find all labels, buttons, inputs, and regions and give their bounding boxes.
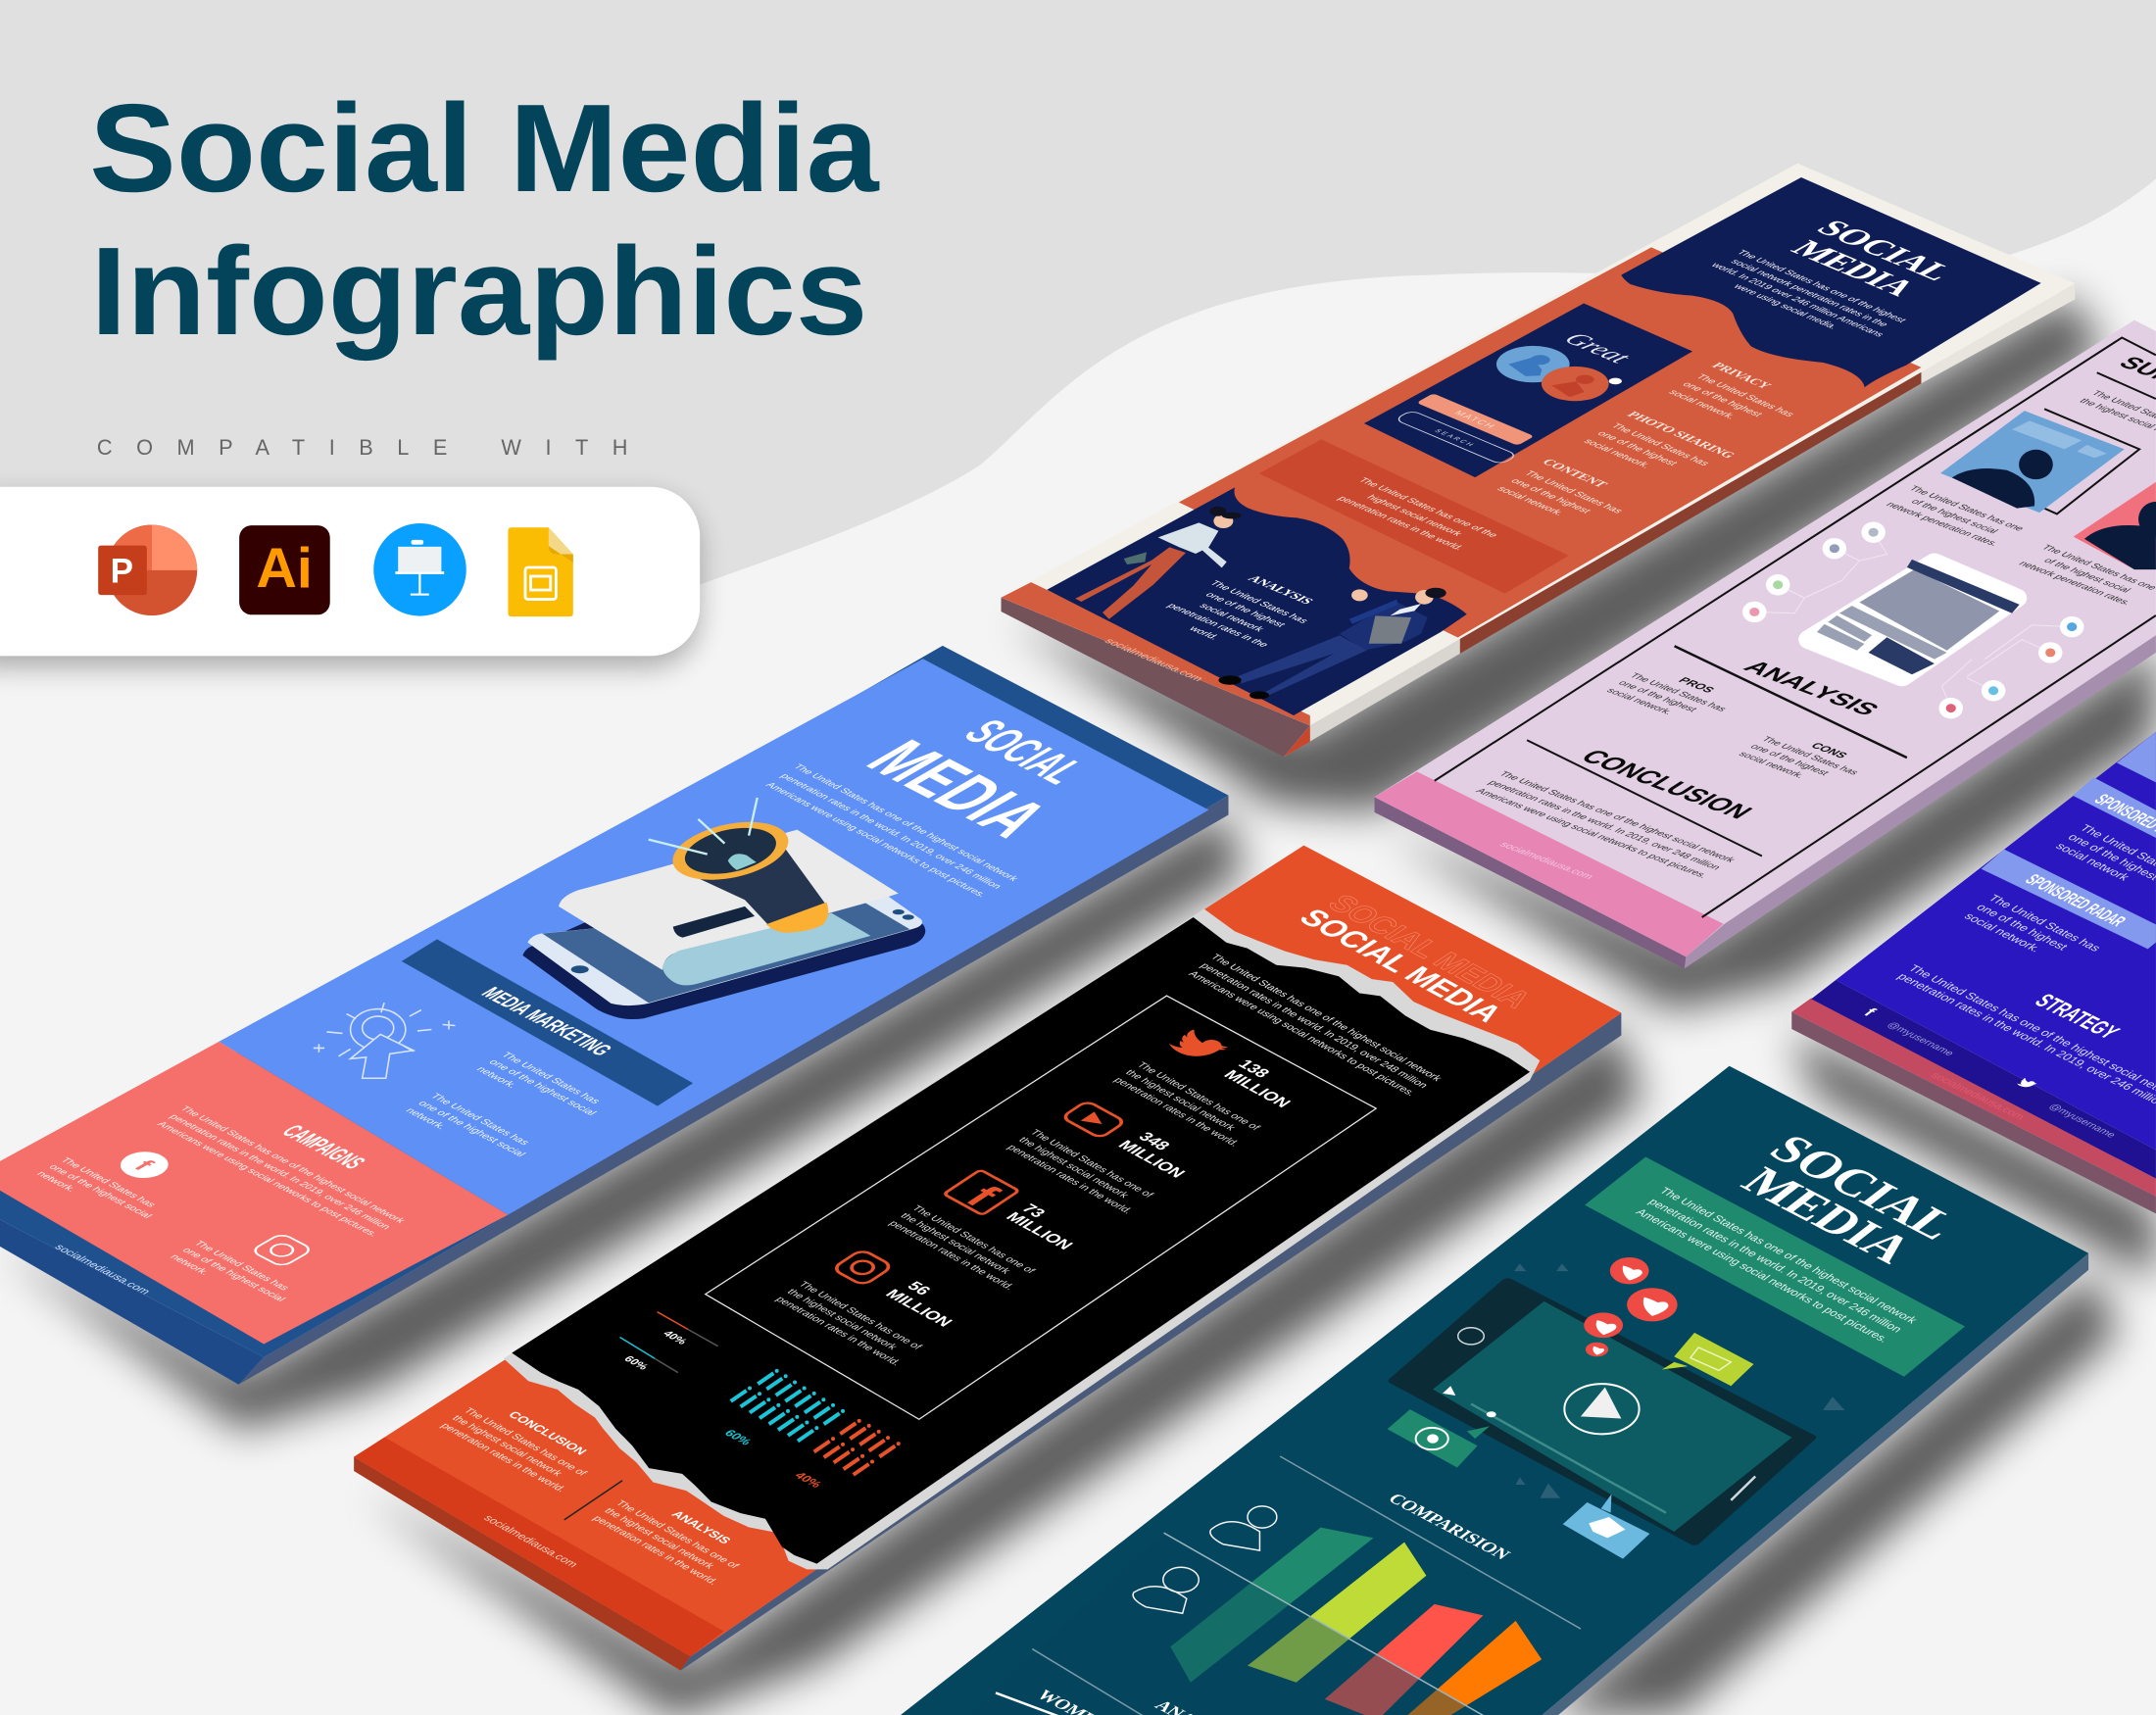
text: pros: The United States has (1627, 672, 1729, 713)
text: instagram paragraph: one of the highest social (179, 1247, 288, 1303)
top navy wave block (1621, 177, 2041, 387)
illustration: tablet with social icons (1527, 521, 2083, 857)
text: callout paragraph: The United States has one of the (1355, 476, 1500, 539)
stat: instagram: MILLION (881, 1287, 956, 1330)
text: intro paragraph: The United States has one of the highest social network (791, 763, 1021, 883)
text: analysis: penetration rates in the world. (590, 1514, 720, 1587)
card slab and colour blocks (1791, 732, 2156, 1213)
icon: facebook: f (956, 1179, 1011, 1213)
chart: percentages and pictogram: 60% (621, 1354, 650, 1372)
title: Social Media (89, 78, 880, 219)
button: match (1416, 393, 1535, 446)
text: photo sharing: one of the highest (1594, 429, 1680, 467)
social handle: facebook (1860, 1005, 1957, 1058)
heading: comparision: COMPARISION (1384, 1491, 1514, 1562)
panel: black and orange infographic card (354, 846, 1621, 1671)
text: analysis: one of the highest (1202, 591, 1288, 629)
footer url: socialmediausa.com (1102, 637, 1205, 683)
text: intro paragraph: world. In 2019 over 246 million Americans (1707, 262, 1886, 338)
text: marketing paragraph two: The United States has (427, 1092, 532, 1147)
text: facebook paragraph: The United States has (58, 1156, 159, 1209)
text: privacy: The United States has (1693, 372, 1797, 418)
button: match: MATCH (1451, 410, 1497, 430)
stat: instagram (773, 1250, 956, 1367)
stat: facebook: MILLION (1002, 1209, 1077, 1252)
panel: red and navy infographic card (1002, 164, 2075, 757)
stat: facebook: the highest social network (898, 1211, 1013, 1276)
social handle: facebook: @myusername (1885, 1020, 1957, 1058)
stat: instagram: penetration rates in the world. (773, 1295, 904, 1367)
heading: social media: MEDIA (1731, 1158, 1926, 1271)
text: analysis: ANALYSIS (668, 1509, 734, 1545)
text: content (1494, 457, 1626, 530)
banner: media marketing: MEDIA MARKETING (475, 984, 617, 1059)
button: search: SEARCH (1433, 428, 1476, 448)
footer url: socialmediausa.com (1928, 1071, 2027, 1122)
text: radar paragraph: one of the highest (1974, 902, 2071, 953)
text: cons: social network. (1736, 751, 1807, 780)
text: callout paragraph: penetration rates in the world. (1335, 495, 1466, 552)
card artwork (0, 646, 1229, 1385)
heading: analysis: ANALYSIS (1738, 658, 1885, 719)
text: marketing paragraph one: The United States has (499, 1051, 603, 1105)
text: content: The United States has (1522, 469, 1626, 514)
text: instagram paragraph: network. (168, 1253, 212, 1277)
card artwork (1375, 320, 2156, 968)
text: conclusion: CONCLUSION (506, 1409, 590, 1457)
stat: facebook: penetration rates in the world. (886, 1219, 1016, 1292)
illustration: bottom navy block with woman and man (1047, 487, 1467, 715)
stat: instagram: The United States has one of (796, 1280, 924, 1351)
text: content: CONTENT (1539, 457, 1611, 489)
icons: people outlines (1133, 1506, 1277, 1613)
text: intro paragraph: were using social media. (1730, 282, 1839, 330)
text: marketing paragraph one: one of the highest social (486, 1058, 599, 1117)
text: cons: The United States has (1759, 736, 1861, 776)
chart: percentages and pictogram: 60% (721, 1428, 755, 1447)
text: analysis: ANALYSIS (1245, 573, 1317, 606)
icon: click cursor (314, 1003, 455, 1078)
panel: lilac infographic card (1375, 320, 2156, 968)
phone illustration: profile circles (1496, 346, 1622, 401)
frame around statistics (706, 996, 1376, 1419)
text: content: social network. (1494, 485, 1567, 517)
icon: PowerPoint: P (111, 553, 133, 591)
text: image caption one: of the highest social (1908, 498, 2000, 535)
panel: compatibility pill (0, 487, 700, 667)
text: intro paragraph: The United States has one of the highest (1734, 249, 1908, 324)
text: campaigns paragraph: The United States has one of the highest social network (177, 1105, 408, 1225)
stat: facebook (886, 1169, 1077, 1292)
text: analysis: The United States has one of (612, 1498, 741, 1570)
card slab and colour blocks (1002, 164, 2075, 757)
stat: facebook: 73 (1018, 1201, 1050, 1220)
compatible with label: COMPATIBLE WITH (97, 435, 627, 460)
chart: percentages and pictogram: 40% (792, 1470, 825, 1490)
heading: social media outlined: SOCIAL MEDIA (1320, 890, 1540, 1012)
text: pros: one of the highest (1615, 679, 1699, 713)
text: analysis (1151, 573, 1317, 657)
stat: twitter: penetration rates in the world. (1111, 1076, 1242, 1149)
stat: twitter: The United States has one of (1134, 1060, 1262, 1132)
text: privacy: social network. (1666, 388, 1739, 420)
stat: youtube: The United States has one of (1027, 1128, 1155, 1200)
text: photo sharing (1581, 410, 1739, 483)
title (89, 78, 880, 362)
panel: blue and coral infographic card (0, 646, 1229, 1385)
text: conclusion paragraph: Americans were using social networks to post pictures. (1473, 787, 1709, 880)
text: image caption two: The United States has one (2038, 544, 2156, 592)
text: analysis: The United States has (1207, 579, 1311, 625)
text: privacy: PRIVACY (1708, 361, 1776, 391)
text: marketing paragraph one: network. (473, 1065, 519, 1090)
stat: twitter: MILLION (1220, 1067, 1295, 1110)
text: conclusion: penetration rates in the world. (438, 1421, 568, 1494)
text: conclusion: the highest social network (450, 1414, 565, 1478)
text: cons (1736, 736, 1861, 792)
text: analysis: penetration rates in the (1164, 602, 1271, 649)
chart: percentages and pictogram: 40% (660, 1329, 689, 1347)
icon: instagram (832, 1250, 893, 1286)
text: photo sharing: social network. (1581, 437, 1653, 469)
text: intro paragraph: penetration rates in the world. In 2019, over 246 million (1645, 1197, 1904, 1335)
stat: facebook: The United States has one of (909, 1203, 1038, 1275)
text: pros: PROS (1676, 675, 1718, 695)
footer url: socialmediausa.com (480, 1514, 580, 1569)
icon: PowerPoint (98, 525, 197, 615)
heading: social media: MEDIA (849, 729, 1067, 848)
text: marketing paragraph two: network. (403, 1106, 449, 1131)
icon: twitter bird (1166, 1027, 1229, 1065)
heading: social media: SOCIAL (1758, 1126, 1970, 1248)
heading: social media (849, 712, 1097, 848)
heading: social media: MEDIA (1783, 235, 1926, 301)
icon: facebook: f (127, 1156, 160, 1174)
heading: social media: SOCIAL (952, 712, 1097, 791)
stat: youtube: 348 (1135, 1129, 1174, 1152)
text: image caption two: network penetration rates. (2016, 560, 2133, 607)
text: cons: one of the highest (1747, 743, 1831, 777)
social handle: twitter: @myusername (2046, 1102, 2119, 1140)
text: intro paragraph: The United States has one of the highest social network (1656, 1186, 1920, 1326)
social handle: facebook: f (1860, 1005, 1881, 1019)
text: conclusion: The United States has one of (461, 1406, 589, 1478)
text: conclusion paragraph: penetration rates in the world. In 2019, over 248 million (1486, 779, 1723, 871)
stat: twitter: 138 (1234, 1056, 1274, 1080)
text: image caption one: The United States has one (1906, 485, 2027, 533)
heading: social media solid: SOCIAL MEDIA (1292, 904, 1510, 1027)
text: analysis: world. (1185, 624, 1222, 641)
heading: social media: SOCIAL (1808, 215, 1963, 285)
text: pros (1603, 672, 1729, 728)
stat: youtube: penetration rates in the world. (1004, 1143, 1135, 1215)
stat: youtube: MILLION (1114, 1138, 1189, 1181)
text: great: Great (1557, 328, 1639, 367)
icon: facebook (111, 1147, 178, 1184)
text: photo sharing: The United States has (1608, 422, 1712, 467)
stat: instagram: 56 (904, 1279, 935, 1298)
text: image caption two: of the highest social (2040, 557, 2132, 594)
text: facebook paragraph: network. (34, 1170, 78, 1194)
text: conclusion paragraph: The United States has one of the highest social network (1496, 770, 1738, 864)
icon: instagram (251, 1233, 314, 1267)
text: callout paragraph: highest social network (1364, 494, 1465, 538)
panel: teal infographic card (894, 1066, 2088, 1715)
stat: youtube: the highest social network (1016, 1136, 1132, 1200)
text: intro paragraph: Americans were using social networks to post pictures. (762, 781, 988, 899)
social handle: twitter (2016, 1077, 2119, 1140)
text: marketing paragraph two: one of the highest social (416, 1100, 528, 1158)
text: pros: social network. (1603, 687, 1675, 716)
stat: twitter (1111, 1027, 1295, 1149)
illustration: phone and megaphone (522, 798, 925, 1019)
chart: percentages and pictogram (621, 1329, 899, 1490)
text: content: one of the highest (1508, 477, 1593, 514)
text: analysis: the highest social network (602, 1506, 717, 1571)
text: image caption one: network penetration rates. (1884, 501, 2000, 548)
text: analysis: social network (1197, 602, 1267, 633)
icon: facebook (939, 1169, 1019, 1218)
text: cons: CONS (1808, 741, 1851, 760)
card artwork with torn paper edges (354, 846, 1621, 1671)
text: privacy (1666, 361, 1797, 434)
text: instagram paragraph: The United States has (191, 1239, 292, 1292)
text: facebook paragraph: one of the highest social (46, 1163, 155, 1220)
text: intro paragraph: The United States has one of the highest social network (1207, 953, 1445, 1083)
text: photo sharing: PHOTO SHARING (1624, 410, 1739, 460)
text: intro paragraph: social network penetration rates in the (1728, 258, 1890, 328)
text: campaigns paragraph: penetration rates in the world. In 2019, over 246 million (167, 1113, 393, 1231)
icon: Illustrator (239, 525, 330, 614)
button: search (1395, 410, 1518, 465)
stat: instagram: the highest social network (784, 1288, 900, 1351)
footer url: socialmediausa.com (52, 1244, 152, 1297)
card artwork (894, 1066, 2088, 1715)
pictogram: teal people (731, 1371, 843, 1442)
heading: campaigns: CAMPAIGNS (275, 1121, 371, 1173)
text: intro paragraph: penetration rates in the world. In 2019, over 246 million (777, 772, 1004, 891)
text: campaigns paragraph: Americans were using social networks to post pictures. (154, 1120, 379, 1239)
text: radar paragraph: The United States has (1985, 893, 2104, 954)
text: intro paragraph: penetration rates in the world. In 2019, over 248 million (1198, 961, 1431, 1090)
icon: Google Slides (508, 527, 573, 616)
text: intro paragraph: Americans were using social networks to post pictures. (1633, 1207, 1891, 1345)
icon: youtube (1061, 1101, 1125, 1139)
footer url: socialmediausa.com (1496, 841, 1596, 881)
text: radar paragraph: social network. (1961, 910, 2044, 955)
title: Infographics (91, 221, 867, 362)
text: privacy: one of the highest (1680, 380, 1765, 418)
pictogram: orange people (814, 1421, 899, 1475)
panel: indigo infographic card (1791, 732, 2156, 1213)
stat: youtube (1004, 1101, 1189, 1215)
heading: conclusion: CONCLUSION (1574, 746, 1759, 822)
text: sponsored paragraph: social network (2052, 841, 2133, 883)
text: intro paragraph: Americans were using social networks to post pictures. (1186, 969, 1418, 1098)
stat: twitter: the highest social network (1122, 1068, 1239, 1133)
icon: Illustrator: Ai (256, 537, 313, 600)
icon: Keynote (373, 523, 466, 616)
